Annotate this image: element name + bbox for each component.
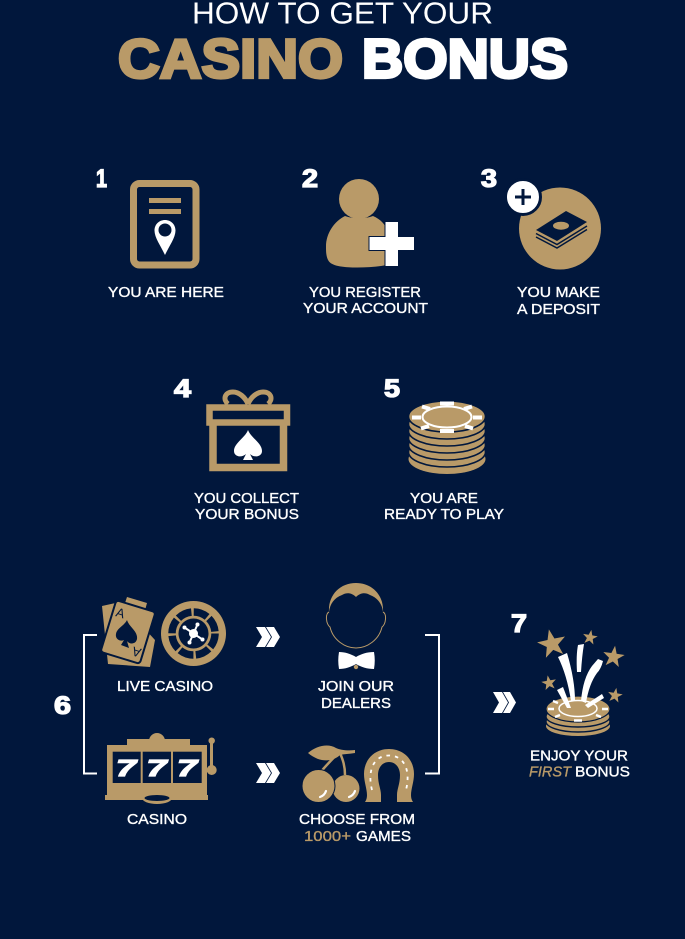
title line 2: casino: CASINO: [118, 28, 343, 90]
label: BONUS: [575, 764, 630, 780]
label: choose from 1000+ games: 1000+: [304, 828, 351, 845]
icon: dealer: [326, 583, 386, 669]
left bracket: [84, 635, 97, 774]
icon: playing cards: [101, 597, 155, 667]
label: join our dealers: JOIN OUR: [318, 678, 394, 695]
step 6: [54, 583, 439, 845]
number 7: 7: [511, 610, 527, 638]
step 7: [511, 610, 630, 780]
number 1: 1: [96, 165, 107, 193]
label: join our dealers: [318, 678, 394, 712]
number 2: 2: [302, 165, 318, 193]
number 6: 6: [54, 692, 71, 720]
icon: stack of chips: [408, 401, 486, 474]
icon: user with plus: [326, 179, 414, 268]
label: A DEPOSIT: [517, 301, 600, 318]
icon: roulette wheel: [161, 601, 226, 666]
number 4: 4: [174, 375, 191, 403]
arrow to step 7: [493, 692, 516, 713]
label: YOU ARE HERE: [108, 284, 224, 301]
label: READY TO PLAY: [384, 506, 504, 523]
label: ENJOY YOUR: [530, 748, 628, 764]
label: YOU MAKE: [517, 284, 600, 301]
step 3: [481, 165, 601, 318]
icon: document with map pin: [134, 184, 196, 265]
label: YOU REGISTER: [309, 284, 421, 301]
step 2: [302, 165, 428, 317]
label: choose from 1000+ games: CHOOSE FROM: [299, 811, 415, 828]
arrow: [256, 763, 280, 783]
icon: slot machine: 7: [116, 755, 138, 781]
label: YOU ARE: [410, 490, 478, 507]
label: [517, 284, 600, 318]
label: choose from 1000+ games: GAMES: [356, 828, 411, 845]
icon: gift box with spade: [210, 392, 287, 468]
label: [384, 490, 504, 523]
icon: slot machine: [105, 733, 217, 804]
label: FIRST: [529, 764, 573, 780]
label: YOUR BONUS: [195, 506, 299, 523]
icon: cherries: [302, 746, 360, 802]
label: choose from 1000+ games: [299, 811, 415, 845]
label: live casino: LIVE CASINO: [117, 678, 213, 695]
step 4: [174, 375, 299, 523]
number 5: 5: [384, 375, 400, 403]
right bracket: [425, 635, 439, 774]
label: casino: CASINO: [127, 811, 187, 828]
arrow: [256, 627, 280, 647]
label: [194, 490, 299, 523]
label: [303, 284, 428, 317]
title line 2: bonus: BONUS: [362, 28, 568, 90]
icon: deposit money: [506, 180, 601, 270]
icon: playing cards: A: [130, 643, 143, 660]
number 3: 3: [481, 165, 497, 193]
icon: playing cards: A: [114, 605, 127, 622]
icon: slot machine: 7: [177, 755, 199, 781]
label: YOU COLLECT: [194, 490, 299, 507]
title: [118, 0, 568, 90]
label: YOUR ACCOUNT: [303, 300, 428, 317]
label: [529, 748, 630, 780]
label: join our dealers: DEALERS: [321, 695, 391, 712]
step 1: [96, 165, 224, 301]
icon: slot machine: 7: [146, 755, 168, 781]
step 5: [384, 375, 504, 523]
icon: chips with stars and fireworks: [535, 626, 626, 736]
icon: horseshoe: [364, 749, 414, 802]
